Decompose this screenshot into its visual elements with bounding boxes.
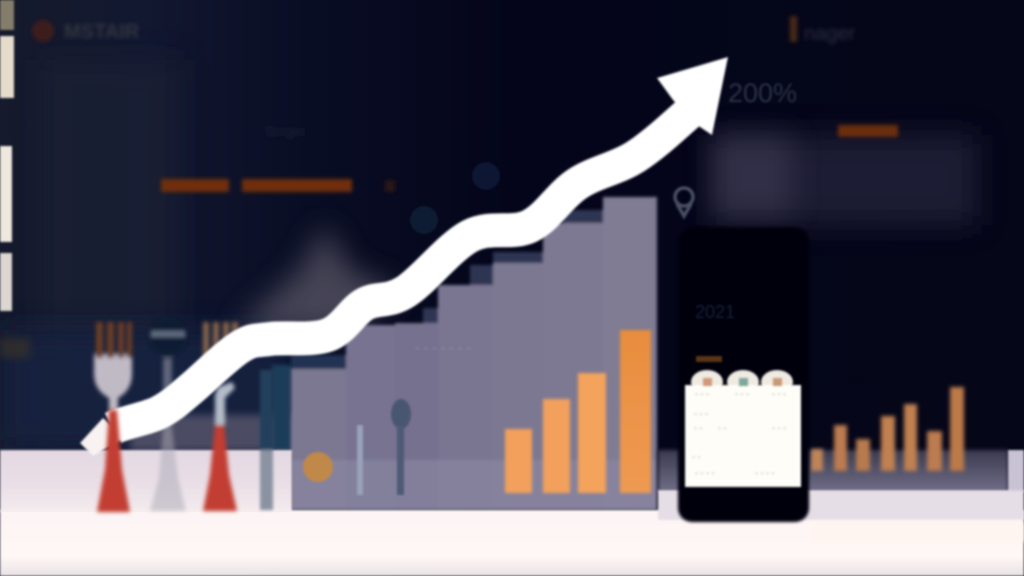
phone card text: - - — [694, 423, 702, 433]
orange coin icon — [303, 452, 333, 482]
dessert fork left red stem — [97, 410, 130, 512]
phone card tabs — [691, 370, 793, 394]
blurred dashboard header left — [32, 20, 140, 43]
orange bars — [505, 330, 651, 493]
phone orange tag — [696, 356, 722, 362]
phone card text: - - - — [772, 389, 786, 399]
glass stem middle — [149, 318, 187, 511]
blurred orange dashboard tags: Singer — [265, 123, 306, 139]
dessert fork right — [203, 322, 238, 511]
phone tab icons — [703, 378, 782, 386]
small glass silhouettes: - - - - - - - — [415, 339, 471, 355]
table foreground — [0, 490, 1024, 576]
phone card text: - - — [692, 452, 700, 462]
location pin icon — [675, 188, 693, 216]
phone card text: - - - — [695, 389, 709, 399]
white growth arrow — [80, 57, 728, 456]
smartphone — [678, 227, 809, 522]
blurred dashboard header right — [790, 16, 855, 45]
dessert fork left head — [94, 322, 132, 412]
phone screen heading: 2021 — [695, 302, 735, 322]
blurred dashboard header right: nager — [804, 23, 855, 45]
phone white card — [685, 385, 801, 487]
phone card text — [692, 389, 786, 478]
table surface right — [658, 450, 1008, 492]
table edge far right — [1008, 450, 1024, 492]
right orange bar chart — [811, 387, 964, 471]
blurred percentage label: 200% — [728, 78, 797, 108]
phone card text: - - - — [735, 389, 749, 399]
table surface left — [0, 450, 292, 512]
phone card text: - - - - — [695, 468, 714, 478]
phone card text: - - - - — [755, 468, 774, 478]
blurred dashboard header left: MSTAIR — [64, 21, 140, 43]
blurred orange dashboard tags — [161, 123, 898, 192]
thin stem behind arrow — [260, 370, 273, 510]
small glass silhouettes — [357, 162, 500, 495]
phone card text: - - - — [772, 423, 786, 433]
phone card text: - - — [718, 423, 726, 433]
grey bar chart — [291, 197, 657, 510]
phone card text: - - - — [694, 409, 708, 419]
